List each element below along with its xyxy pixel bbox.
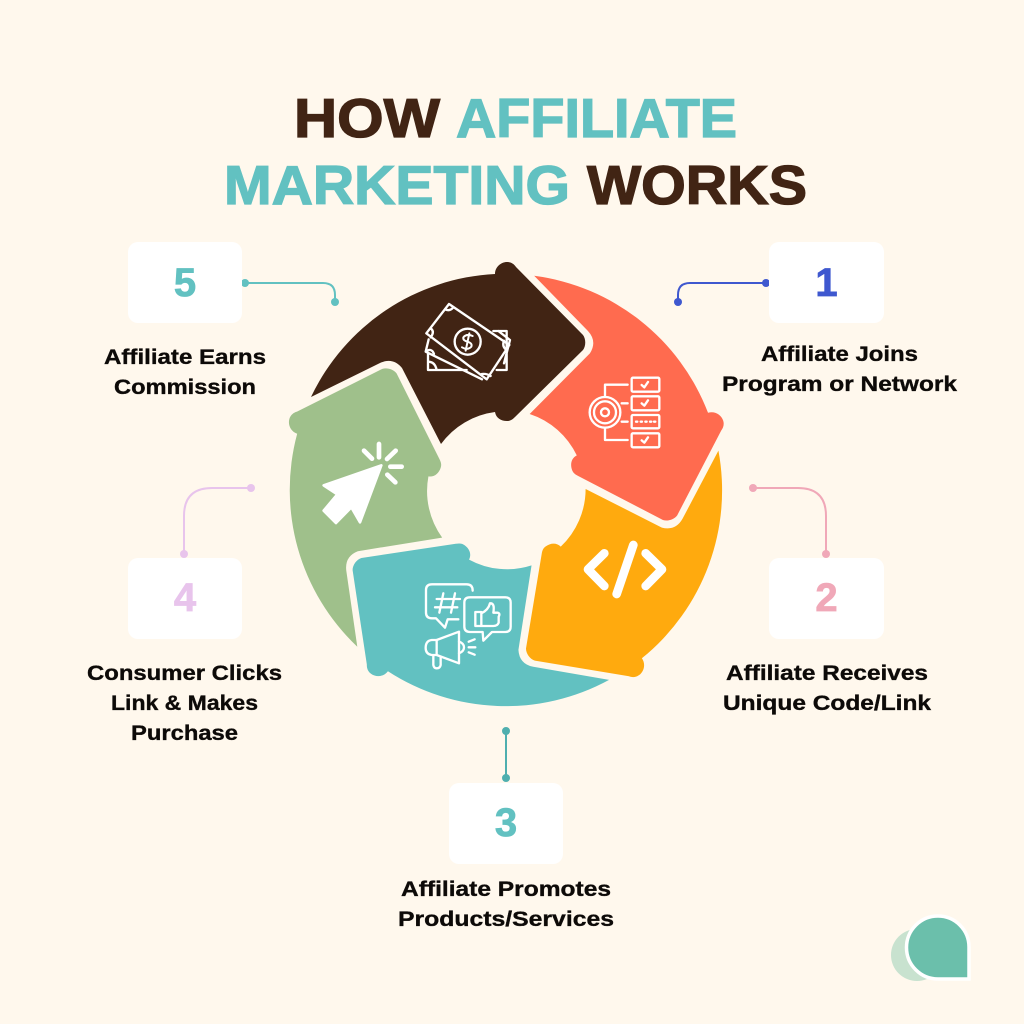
label: step 2: Affiliate Receives [726,662,928,685]
icon: money stack [426,304,510,379]
label: step 4 [87,662,282,745]
number card 1: 1 [815,261,838,305]
label: step 1: Affiliate Joins [761,343,918,366]
number card 2: 2 [815,576,838,620]
icon: cursor click [324,444,402,523]
number card 3 [449,783,563,864]
label: step 3: Affiliate Promotes [401,878,611,901]
number card 2 [769,558,884,639]
segment: step 2 orange arrow [469,413,798,721]
label: step 5: Commission [114,376,256,399]
label: step 4: Link & Makes [111,692,258,715]
label: step 3: Products/Services [398,908,614,931]
title: WORKS [587,154,807,216]
segment: step 1 red arrow [489,234,747,551]
logo [891,916,969,981]
segment: step 5 brown arrow [311,262,585,444]
title [224,87,807,216]
number card 4: 4 [174,576,197,620]
connector: step 3 [502,727,510,782]
segment: step 4 green arrow [229,344,487,661]
label: step 5 [104,346,266,399]
label: step 2 [723,662,931,715]
icon: code brackets [588,545,662,594]
number card 5 [128,242,242,323]
label: step 1 [722,343,957,396]
connector: step 4 [180,484,255,558]
title: MARKETING [224,154,570,216]
number card 4 [128,558,242,639]
label: step 2: Unique Code/Link [723,692,931,715]
number card 5: 5 [174,261,196,305]
number card 3: 3 [495,801,517,845]
label: step 4: Purchase [131,722,238,745]
label: step 5: Affiliate Earns [104,346,266,369]
segment: step 3 teal arrow [308,481,637,789]
label: step 1: Program or Network [722,373,957,396]
label: step 4: Consumer Clicks [87,662,282,685]
cycle ring [229,234,798,789]
connector: step 1 [674,279,770,306]
title: HOW [294,87,440,149]
number card 1 [769,242,884,323]
connector: step 5 [241,279,339,306]
label: step 3 [398,878,614,931]
connector: step 2 [749,484,830,558]
icon: target checklist [590,378,659,447]
title: AFFILIATE [456,87,737,149]
icon: social media and megaphone [426,584,511,668]
